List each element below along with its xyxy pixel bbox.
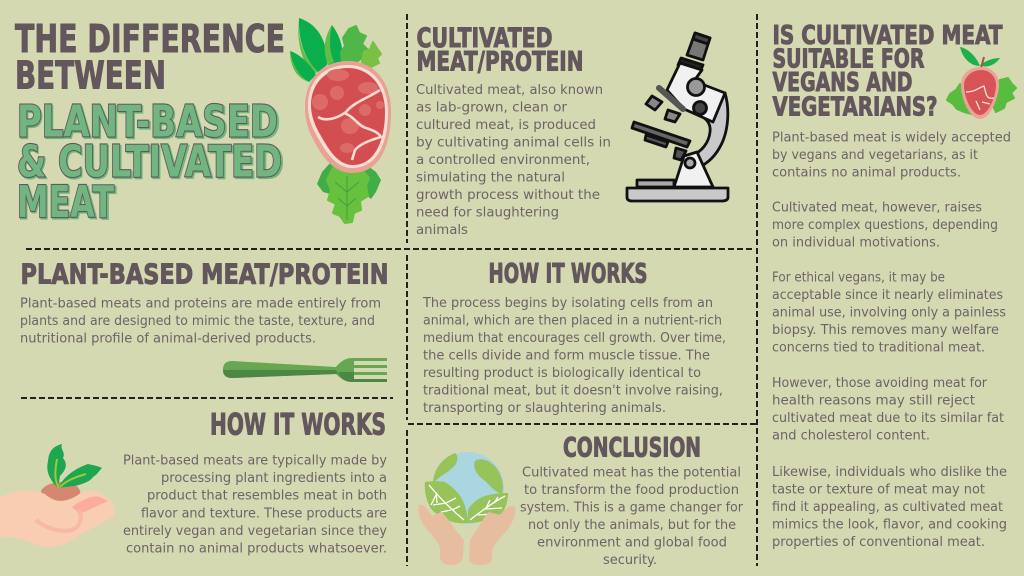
title: PLANT-BASED — [18, 98, 280, 149]
heading: is cultivated meat suitable: VEGANS AND — [772, 68, 912, 98]
text: plant-based how it works — [123, 454, 387, 556]
text: conclusion: to transform the food production — [524, 483, 739, 498]
text: plant-based description — [20, 296, 381, 346]
text: suitability for vegans: mimics the look, flavor, and cooking — [772, 518, 1007, 532]
text: suitability for vegans: on individual motivations. — [772, 236, 940, 250]
text: suitability for vegans: and cholesterol content. — [772, 428, 930, 444]
text: suitability for vegans: animal use, involving only a painless — [772, 306, 1006, 320]
heading: is cultivated meat suitable — [772, 21, 1003, 122]
text: suitability for vegans — [772, 130, 1011, 550]
text: suitability for vegans: Plant-based meat is widely accepted — [772, 130, 1011, 146]
text: cultivated meat description — [416, 83, 611, 238]
heading: is cultivated meat suitable: SUITABLE FOR — [772, 44, 924, 74]
heading: conclusion: CONCLUSION — [563, 432, 701, 464]
title: THE DIFFERENCE — [15, 17, 285, 61]
heading: how it works (plant-based): HOW IT WORKS — [210, 408, 386, 442]
heading: cultivated meat/protein — [416, 23, 584, 78]
text: suitability for vegans: However, those avoiding meat for — [772, 376, 988, 391]
text: plant-based how it works: flavor and texture. These products are — [141, 506, 387, 522]
text: conclusion: environment and global food — [537, 536, 727, 550]
text: plant-based how it works: product that resembles meat in both — [147, 488, 387, 504]
text: conclusion: system. This is a game changer for — [520, 500, 744, 516]
text: conclusion: security. — [603, 553, 657, 568]
text: cultivated how it works: traditional meat, but it doesn't involve raising, — [423, 384, 723, 398]
icon: microscope — [627, 33, 728, 201]
text: plant-based how it works: Plant-based meats are typically made by — [123, 454, 387, 468]
title: MEAT — [18, 178, 116, 230]
heading: how it works (cultivated): HOW IT WORKS — [488, 258, 648, 290]
text: suitability for vegans: taste or texture of meat may not — [772, 482, 985, 498]
heading: cultivated meat/protein: CULTIVATED — [416, 23, 552, 54]
text: conclusion — [520, 466, 744, 568]
text: cultivated meat description: a controlled environment, — [416, 153, 590, 168]
text: cultivated meat description: cultured meat, is produced — [416, 118, 596, 133]
text: suitability for vegans: properties of conventional meat. — [772, 535, 985, 550]
text: suitability for vegans: cultivated meat due to its similar fat — [772, 411, 1004, 426]
text: plant-based how it works: contain no animal products whatsoever. — [126, 542, 387, 556]
text: cultivated how it works: animal, which are then placed in a nutrient-rich — [423, 314, 722, 328]
title: BETWEEN — [15, 54, 166, 98]
text: plant-based description: Plant-based meats and proteins are made entirely from — [20, 296, 381, 312]
title: PLANT-BASED — [17, 96, 278, 148]
text: cultivated meat description: Cultivated meat, also known — [416, 83, 603, 98]
icon: hand holding sprout — [0, 444, 115, 547]
text: suitability for vegans: For ethical vegans, it may be — [772, 270, 945, 286]
text: plant-based how it works: entirely vegan and vegetarian since they — [123, 524, 387, 539]
title: MEAT — [17, 177, 114, 228]
text: suitability for vegans: find it appealing, as cultivated meat — [772, 500, 1003, 515]
text: cultivated how it works: the cells divide and form muscle tissue. The — [423, 348, 710, 364]
title: & CULTIVATED — [18, 138, 284, 189]
text: cultivated how it works — [422, 296, 726, 416]
text: suitability for vegans: more complex questions, depending — [772, 218, 998, 233]
icon: globe in hands — [418, 452, 515, 565]
text: suitability for vegans: Likewise, individuals who dislike the — [772, 465, 1007, 480]
text: cultivated how it works: medium that encourages cell growth. Over time, — [423, 331, 726, 346]
text: cultivated meat description: growth process without the — [416, 188, 600, 203]
text: suitability for vegans: contains no animal products. — [772, 166, 961, 180]
text: cultivated how it works: transporting or slaughtering animals. — [423, 401, 666, 416]
heading: is cultivated meat suitable: VEGETARIANS? — [772, 92, 938, 122]
text: cultivated how it works: The process begins by isolating cells from an — [422, 296, 713, 311]
text: cultivated meat description: by cultivating animal cells in — [416, 136, 611, 150]
text: suitability for vegans: health reasons may still reject — [772, 394, 975, 408]
icon: fork — [223, 358, 387, 382]
text: suitability for vegans: acceptable since it nearly eliminates — [772, 288, 1003, 303]
text: plant-based how it works: processing plant ingredients into a — [161, 471, 387, 486]
heading: plant-based meat/protein: PLANT-BASED MEAT/PROTEIN — [20, 258, 388, 290]
text: suitability for vegans: Cultivated meat, however, raises — [772, 200, 982, 216]
icon: steak with leaves — [290, 18, 391, 223]
text: cultivated how it works: resulting product is biologically identical to — [423, 366, 701, 381]
text: suitability for vegans: concerns tied to traditional meat. — [772, 340, 985, 356]
icon: small steak — [947, 47, 1016, 119]
text: cultivated meat description: simulating the natural — [416, 170, 565, 186]
text: cultivated meat description: animals — [416, 223, 468, 238]
text: cultivated meat description: as lab-grown, clean or — [416, 100, 568, 116]
heading: cultivated meat/protein: MEAT/PROTEIN — [416, 46, 584, 78]
text: plant-based description: nutritional profile of animal-derived products. — [20, 332, 316, 346]
text: conclusion: not only the animals, but for the — [528, 518, 736, 533]
text: cultivated meat description: need for slaughtering — [416, 206, 559, 220]
text: plant-based description: plants and are designed to mimic the taste, texture, and — [20, 314, 375, 329]
text: suitability for vegans: by vegans and vegetarians, as it — [772, 148, 978, 163]
title: & CULTIVATED — [17, 136, 282, 188]
text: suitability for vegans: biopsy. This removes many welfare — [772, 323, 999, 338]
text: conclusion: Cultivated meat has the potential — [522, 466, 741, 480]
title — [15, 17, 285, 230]
